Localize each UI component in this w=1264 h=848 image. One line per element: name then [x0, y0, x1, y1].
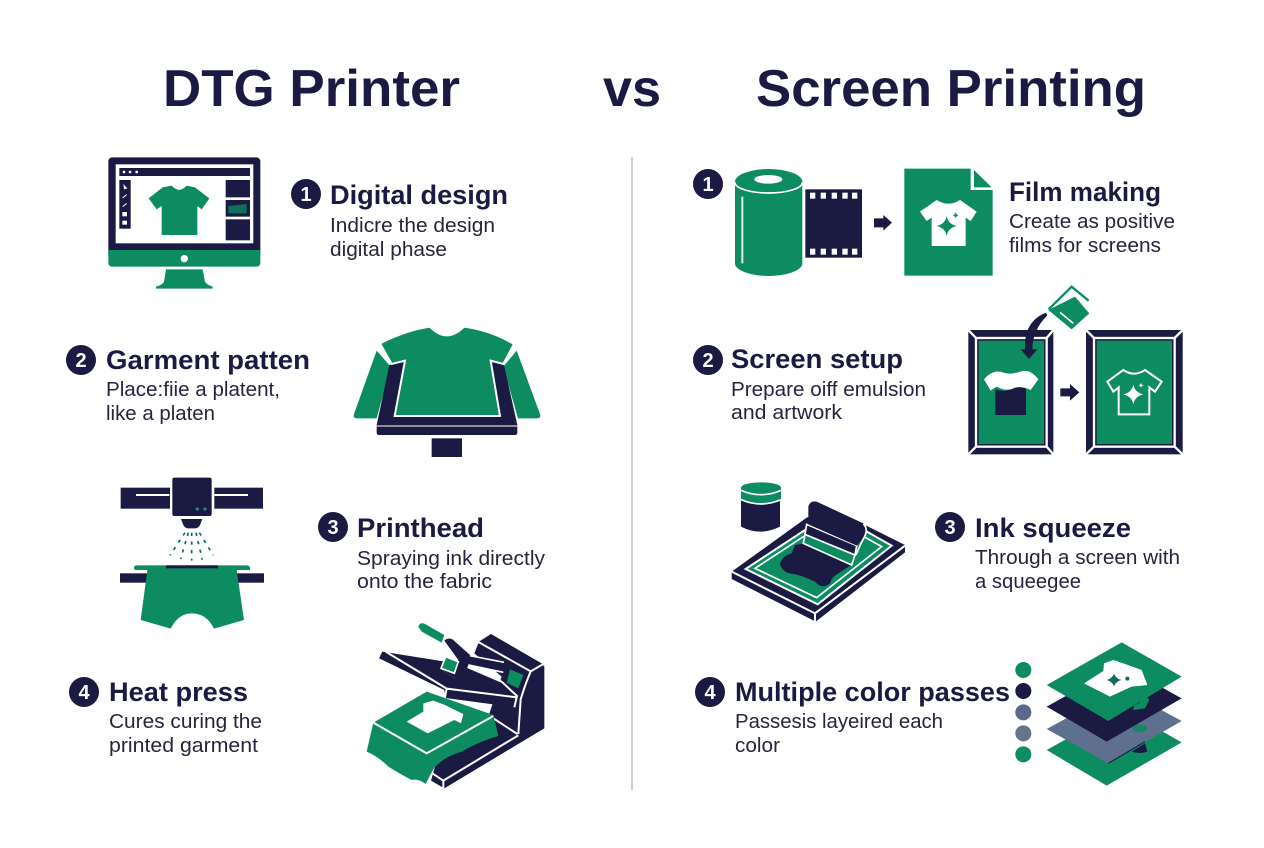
number badge 4: 4: [78, 682, 90, 704]
icon: colour dots and stacked layers: [1015, 642, 1182, 786]
number badge 2: [693, 345, 723, 375]
step 1: digital design: [108, 157, 508, 289]
description: digital design: [330, 215, 495, 261]
number badge 4: [69, 677, 99, 707]
title: DTG Printer: DTG Printer: [163, 60, 460, 118]
step 2: screen setup: [693, 287, 1183, 454]
step 4: heat press: [69, 623, 544, 788]
description: film making: [1009, 211, 1175, 257]
description: ink squeeze: [975, 547, 1180, 593]
step 2: garment pattern: [66, 327, 540, 457]
heading: Printhead: Printhead: [357, 513, 484, 543]
number badge 2: 2: [702, 350, 714, 372]
description: printhead: onto the fabric: [357, 571, 492, 593]
heading: Heat press: Heat press: [109, 677, 248, 707]
number badge 3: 3: [944, 517, 956, 539]
description: printhead: [357, 548, 545, 593]
description: screen setup: and artwork: [731, 402, 843, 424]
icon: shirt on platen: [354, 327, 540, 457]
description: heat press: printed garment: [109, 735, 258, 757]
number badge 1: [693, 169, 723, 199]
description: digital design: digital phase: [330, 239, 447, 261]
icon: coated screens with emulsion: [968, 287, 1183, 454]
description: printhead: Spraying ink directly: [357, 548, 545, 570]
heading: Film making: Film making: [1009, 177, 1161, 207]
description: film making: films for screens: [1009, 235, 1161, 257]
description: multiple color passes: color: [735, 735, 780, 757]
description: ink squeeze: a squeegee: [975, 571, 1081, 593]
description: heat press: [109, 711, 262, 757]
heading: Garment patten: Garment patten: [106, 345, 310, 375]
number badge 2: 2: [75, 350, 87, 372]
heading: Multiple color passes: Multiple color passes: [735, 677, 1010, 707]
description: garment pattern: Place:fiie a platent,: [106, 379, 280, 401]
title: vs: vs: [603, 60, 661, 118]
number badge 3: 3: [327, 517, 339, 539]
step 4: multiple color passes: [695, 642, 1182, 786]
icon: printhead spraying shirt: [120, 478, 264, 629]
title: Screen Printing: Screen Printing: [756, 60, 1146, 118]
description: multiple color passes: [735, 711, 943, 757]
number badge 1: 1: [300, 184, 312, 206]
heading: Ink squeeze: Ink squeeze: [975, 513, 1131, 543]
icon: heat press machine: [367, 623, 544, 788]
icon: computer monitor with shirt design: [108, 157, 260, 289]
number badge 2: [66, 345, 96, 375]
number badge 1: [291, 179, 321, 209]
number badge 3: [935, 512, 965, 542]
description: multiple color passes: Passesis layeired each: [735, 711, 943, 733]
description: garment pattern: like a platen: [106, 403, 215, 425]
icon: squeegee pressing ink through screen: [732, 482, 905, 622]
heading: Screen setup: Screen setup: [731, 344, 903, 374]
description: garment pattern: [106, 379, 280, 425]
description: screen setup: Prepare oiff emulsion: [731, 379, 926, 401]
description: digital design: Indicre the design: [330, 215, 495, 237]
description: film making: Create as positive: [1009, 211, 1175, 233]
panel: screen printing steps: [693, 169, 1183, 786]
description: ink squeeze: Through a screen with: [975, 547, 1180, 569]
step 3: ink squeeze: [732, 482, 1180, 622]
panel: DTG printer steps: [66, 157, 545, 788]
description: heat press: Cures curing the: [109, 711, 262, 733]
step 3: printhead: [120, 478, 545, 629]
step 1: film making: [693, 169, 1175, 276]
number badge 3: [318, 512, 348, 542]
icon: film roll to positive film: [735, 169, 993, 276]
number badge 4: [695, 677, 725, 707]
description: screen setup: [731, 379, 926, 424]
heading: Digital design: Digital design: [330, 180, 508, 210]
number badge 4: 4: [704, 682, 716, 704]
number badge 1: 1: [702, 174, 714, 196]
